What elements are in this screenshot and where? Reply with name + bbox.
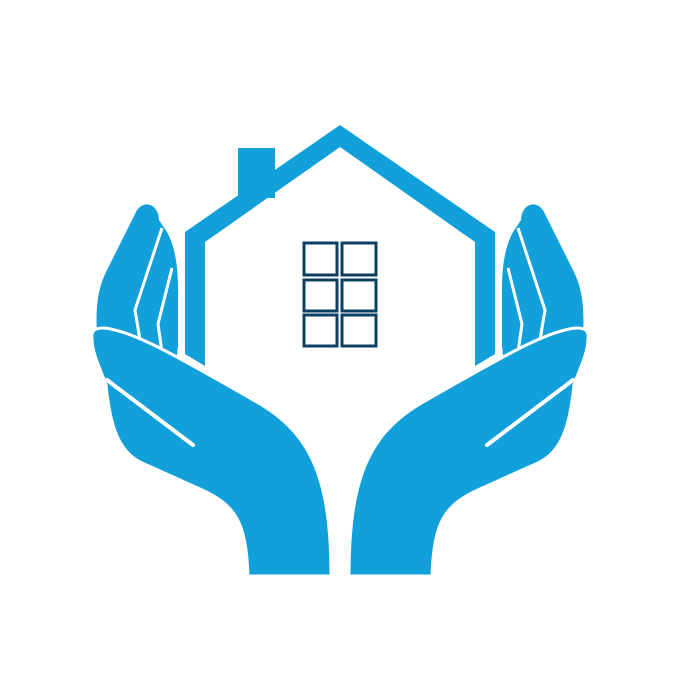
left hand: [92, 204, 331, 576]
chimney: [238, 148, 275, 198]
window: [304, 243, 376, 346]
right hand: [349, 204, 588, 576]
house: [185, 125, 495, 366]
roof and walls: [185, 125, 495, 366]
